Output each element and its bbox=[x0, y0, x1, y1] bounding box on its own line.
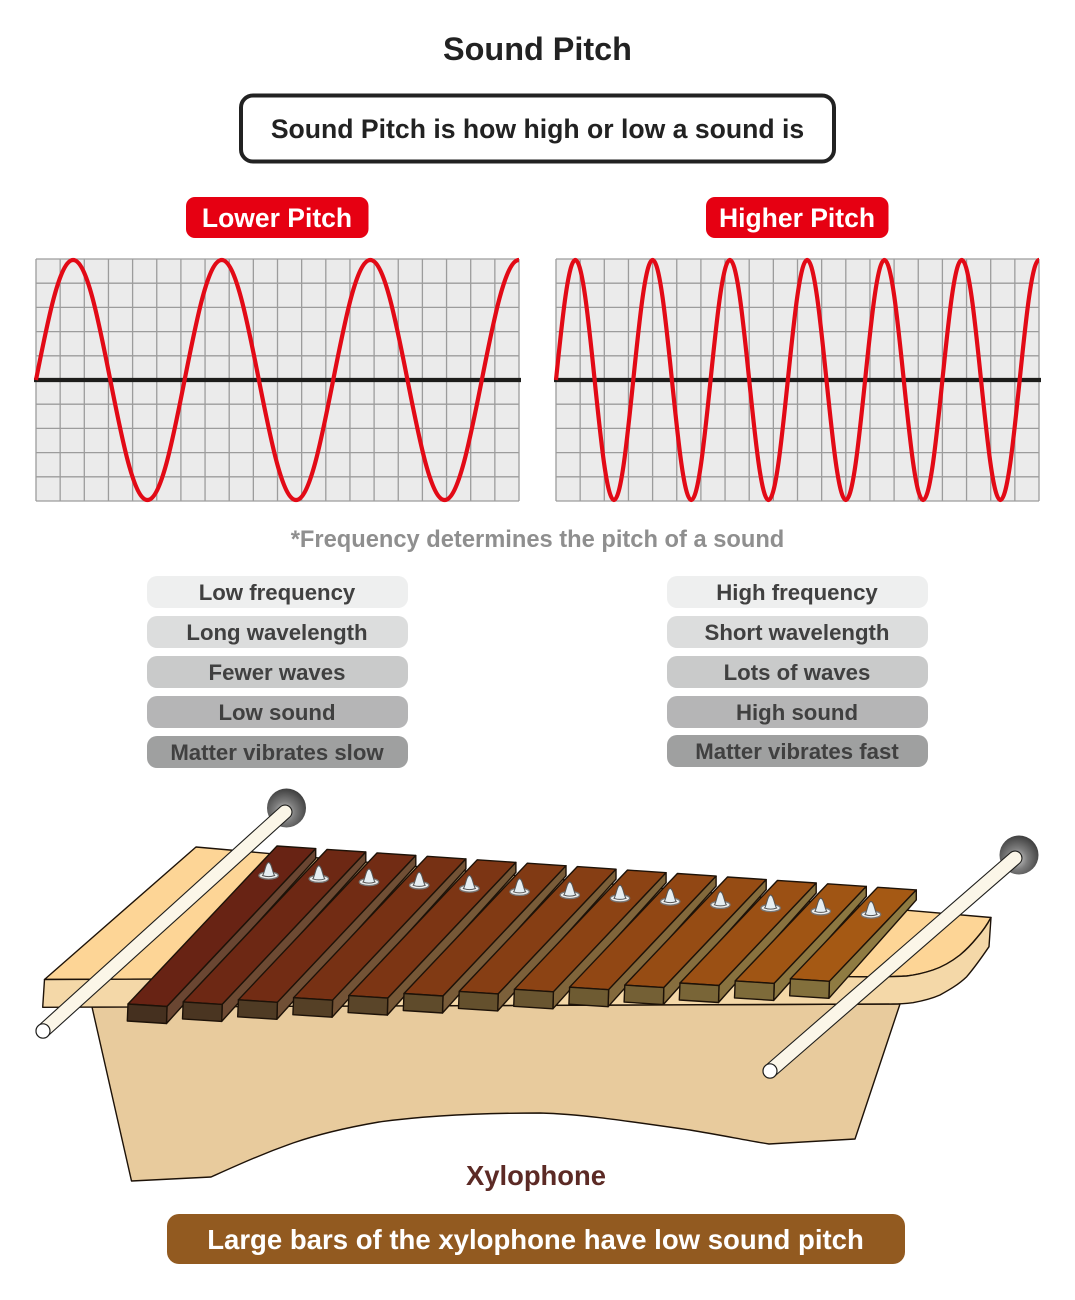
bar 13 bbox=[790, 887, 916, 998]
panel: low pitch properties: Low frequency bbox=[199, 580, 356, 605]
bar 5 bbox=[348, 860, 516, 1015]
caption bar: Large bars of the xylophone have low sound pitch bbox=[207, 1224, 864, 1255]
label: higher pitch: Higher Pitch bbox=[719, 203, 875, 233]
bar 7 bbox=[458, 867, 616, 1011]
definition box bbox=[241, 96, 834, 162]
panel: low pitch properties: Fewer waves bbox=[209, 660, 345, 685]
bar 6 bbox=[403, 863, 566, 1013]
xylophone body bbox=[92, 1004, 900, 1181]
bar 2 bbox=[182, 849, 366, 1021]
panel: low pitch properties: Low sound bbox=[218, 700, 336, 725]
bar 11 bbox=[679, 880, 816, 1002]
bar 9 bbox=[569, 874, 716, 1007]
chart: lower pitch wave bbox=[34, 259, 521, 501]
chart: higher pitch wave bbox=[554, 259, 1041, 501]
illustration: xylophone bbox=[36, 788, 1038, 1181]
panel: low pitch properties: Long wavelength bbox=[186, 620, 368, 645]
board front bbox=[43, 918, 991, 1007]
panel: low pitch properties bbox=[147, 576, 408, 768]
panel: high pitch properties: High frequency bbox=[716, 580, 878, 605]
bar 3 bbox=[238, 853, 416, 1019]
right mallet bbox=[763, 836, 1038, 1078]
bar 8 bbox=[514, 870, 666, 1009]
title: Sound Pitch bbox=[443, 31, 632, 67]
panel: high pitch properties: Lots of waves bbox=[724, 660, 870, 685]
board top bbox=[44, 847, 991, 980]
bar 12 bbox=[734, 884, 866, 1000]
bar 4 bbox=[293, 856, 466, 1017]
note: frequency determines pitch: *Frequency determines the pitch of a sound bbox=[291, 527, 784, 553]
label: xylophone: Xylophone bbox=[466, 1160, 606, 1191]
panel: high pitch properties: High sound bbox=[736, 700, 858, 725]
panel: high pitch properties: Short wavelength bbox=[705, 620, 889, 645]
panel: low pitch properties: Matter vibrates slow bbox=[170, 740, 384, 765]
bar 10 bbox=[624, 877, 766, 1005]
label: lower pitch: Lower Pitch bbox=[202, 203, 352, 233]
caption bar bbox=[167, 1214, 905, 1264]
bar pegs bbox=[259, 862, 881, 918]
panel: high pitch properties bbox=[667, 576, 928, 767]
label: higher pitch bbox=[706, 197, 888, 238]
panel: high pitch properties: Matter vibrates fast bbox=[695, 739, 899, 764]
label: lower pitch bbox=[186, 197, 368, 238]
left mallet bbox=[36, 788, 306, 1038]
definition box: Sound Pitch is how high or low a sound is bbox=[271, 114, 804, 144]
bar 1 bbox=[127, 846, 316, 1024]
